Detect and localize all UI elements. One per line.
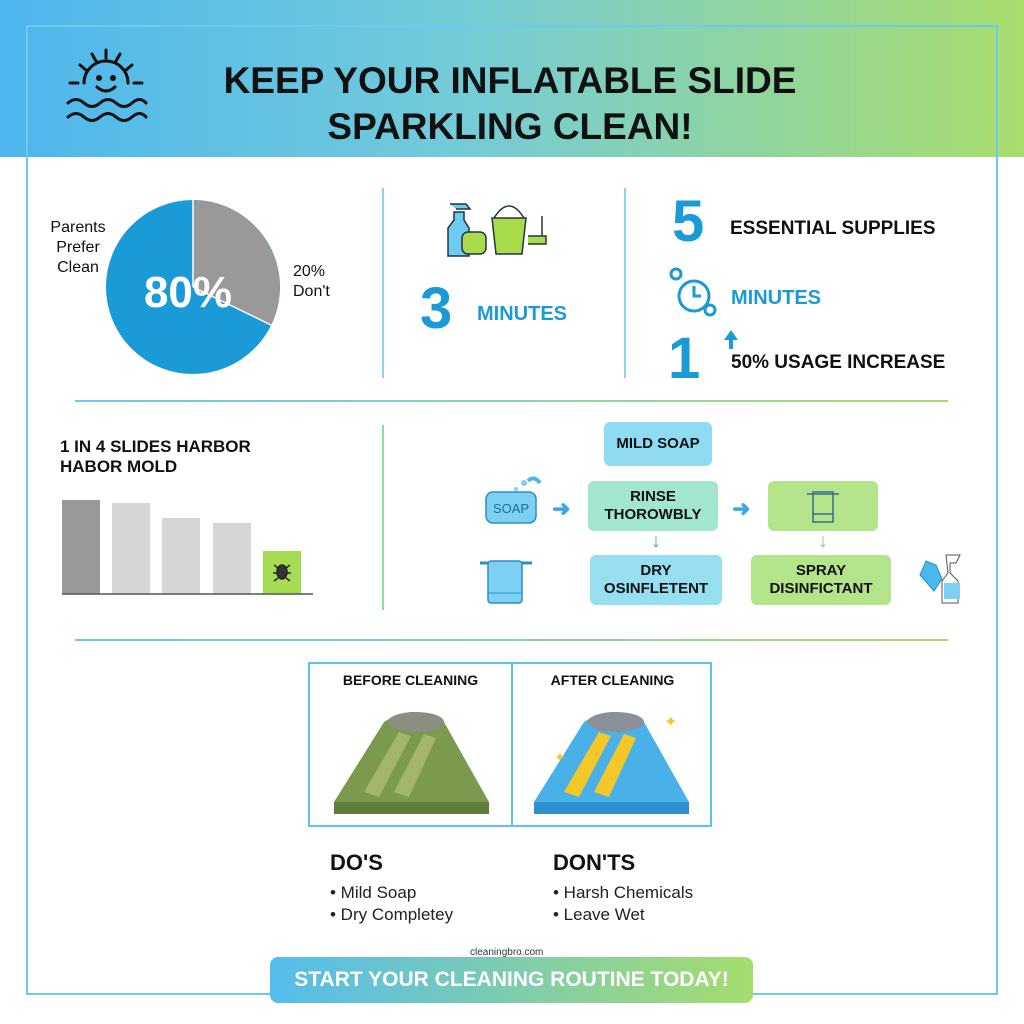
icon: clock <box>670 268 716 316</box>
step: spray: DISINFICTANT <box>769 580 873 597</box>
pie label: don't: 20% <box>293 263 325 280</box>
before/after panel <box>308 662 712 827</box>
image: clean slide <box>534 712 689 814</box>
don'ts list: • Leave Wet <box>553 905 645 924</box>
bar chart <box>62 500 313 595</box>
website: cleaningbro.com <box>470 947 543 958</box>
pie label: don't <box>293 263 330 300</box>
arrow down: ↓ <box>651 530 661 552</box>
call to action button: START YOUR CLEANING ROUTINE TODAY! <box>294 968 729 991</box>
do's list: • Dry Completey <box>330 905 453 924</box>
stat: 3 minutes <box>420 276 567 341</box>
step: towel box <box>768 481 878 531</box>
icon: sun over waves <box>66 48 148 122</box>
step: mild soap: MILD SOAP <box>616 435 700 452</box>
step: dry: DRY <box>640 562 672 579</box>
do's list: DO'S <box>330 850 383 875</box>
image: clean slide: ✦ <box>664 714 677 731</box>
stat: 1 usage increase: 50% USAGE INCREASE <box>731 352 945 373</box>
title: SPARKLING CLEAN! <box>327 106 693 147</box>
don'ts list: DON'TS <box>553 850 635 875</box>
pie label: parents: Clean <box>57 259 99 276</box>
before label: BEFORE CLEANING <box>343 672 478 688</box>
pie label: don't: Don't <box>293 283 330 300</box>
pie chart <box>106 200 280 374</box>
step: rinse: THOROWBLY <box>605 506 701 523</box>
do's list <box>330 850 454 924</box>
do's list: • Mild Soap <box>330 883 416 902</box>
stat: 3 minutes: 3 <box>420 276 452 341</box>
pie chart: 80% <box>144 268 232 317</box>
pie label: parents: Parents <box>50 219 106 236</box>
icon: towel <box>480 560 532 604</box>
stat: 5 supplies: ESSENTIAL SUPPLIES <box>730 218 936 239</box>
image: clean slide: ✦ <box>554 749 566 765</box>
stat: 1 usage increase: 1 <box>668 326 700 391</box>
bar chart title <box>60 437 251 476</box>
don'ts list <box>553 850 693 924</box>
stat: 5 supplies <box>672 189 936 254</box>
step: rinse: RINSE <box>630 488 676 505</box>
bar chart title: HABOR MOLD <box>60 457 177 476</box>
call to action button <box>270 957 753 1003</box>
step: spray <box>751 555 891 605</box>
arrow down: ↓ <box>818 530 828 552</box>
bar chart title: 1 IN 4 SLIDES HARBOR <box>60 437 251 456</box>
step: dry <box>590 555 722 605</box>
title: KEEP YOUR INFLATABLE SLIDE <box>224 60 796 101</box>
step: dry: OSINFLETENT <box>604 580 708 597</box>
step: mild soap <box>604 422 712 466</box>
image: dirty slide <box>334 712 489 814</box>
title <box>224 60 796 147</box>
pie label: parents <box>50 219 106 276</box>
icon: cleaning supplies <box>447 203 547 257</box>
icon: soap: SOAP <box>493 501 529 516</box>
process flow <box>480 422 961 605</box>
pie label: parents: Prefer <box>56 239 100 256</box>
stat: minutes: MINUTES <box>731 287 821 309</box>
arrow: ➜ <box>552 496 570 521</box>
arrow: ➜ <box>732 496 750 521</box>
step: rinse <box>588 481 718 531</box>
icon: soap <box>485 476 542 524</box>
don'ts list: • Harsh Chemicals <box>553 883 693 902</box>
step: spray: SPRAY <box>796 562 846 579</box>
header band <box>0 0 1024 157</box>
stat: 1 usage increase <box>668 326 945 391</box>
icon: glove spray <box>919 554 961 604</box>
stat: 5 supplies: 5 <box>672 189 704 254</box>
stat: 3 minutes: MINUTES <box>477 303 567 325</box>
after label: AFTER CLEANING <box>551 672 674 688</box>
